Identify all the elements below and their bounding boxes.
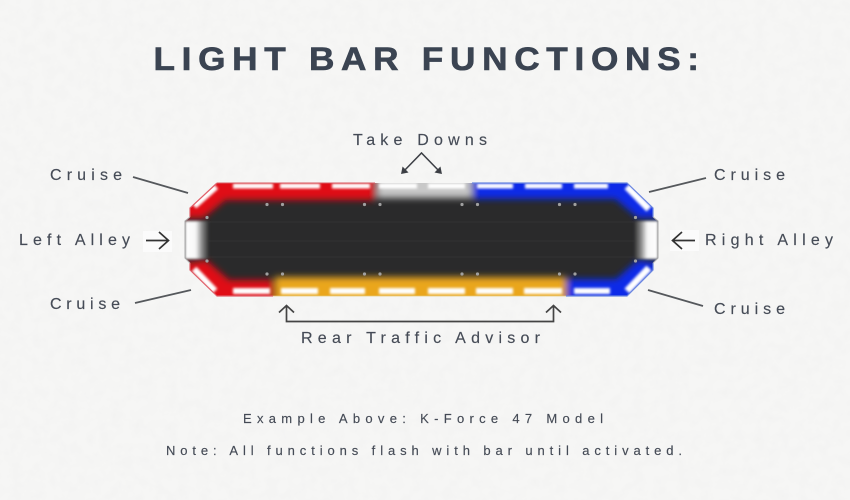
arrow: right alley — [670, 230, 699, 251]
mounting dots — [205, 203, 637, 276]
caption: example model: Example Above: K-Force 47 Model — [243, 411, 603, 426]
arrow: take downs — [402, 153, 441, 173]
pointer: cruise top right — [649, 178, 706, 192]
label: right alley: Right Alley — [705, 232, 833, 249]
pointer: cruise bottom right — [648, 290, 703, 306]
pointer: cruise bottom left — [135, 290, 191, 303]
alley lights — [185, 221, 658, 259]
label: take downs: Take Downs — [353, 132, 487, 149]
light bar — [184, 182, 658, 297]
white LED hot spots — [194, 184, 649, 294]
label: left alley: Left Alley — [19, 232, 130, 249]
note: Note: All functions flash with bar until activated. — [166, 443, 682, 458]
arrow: left alley — [143, 231, 172, 252]
label: cruise top left: Cruise — [50, 167, 122, 184]
pointer: cruise top left — [133, 177, 188, 193]
bar outline — [217, 182, 375, 184]
light glows — [186, 183, 658, 296]
title: LIGHT BAR FUNCTIONS: — [153, 42, 699, 78]
label: cruise top right: Cruise — [714, 167, 785, 184]
label: cruise bottom right: Cruise — [714, 301, 785, 318]
bar body — [185, 183, 658, 296]
label: rear traffic advisor: Rear Traffic Advisor — [301, 330, 541, 347]
label: cruise bottom left: Cruise — [50, 296, 120, 313]
arrow: rear traffic advisor bracket — [279, 306, 561, 322]
